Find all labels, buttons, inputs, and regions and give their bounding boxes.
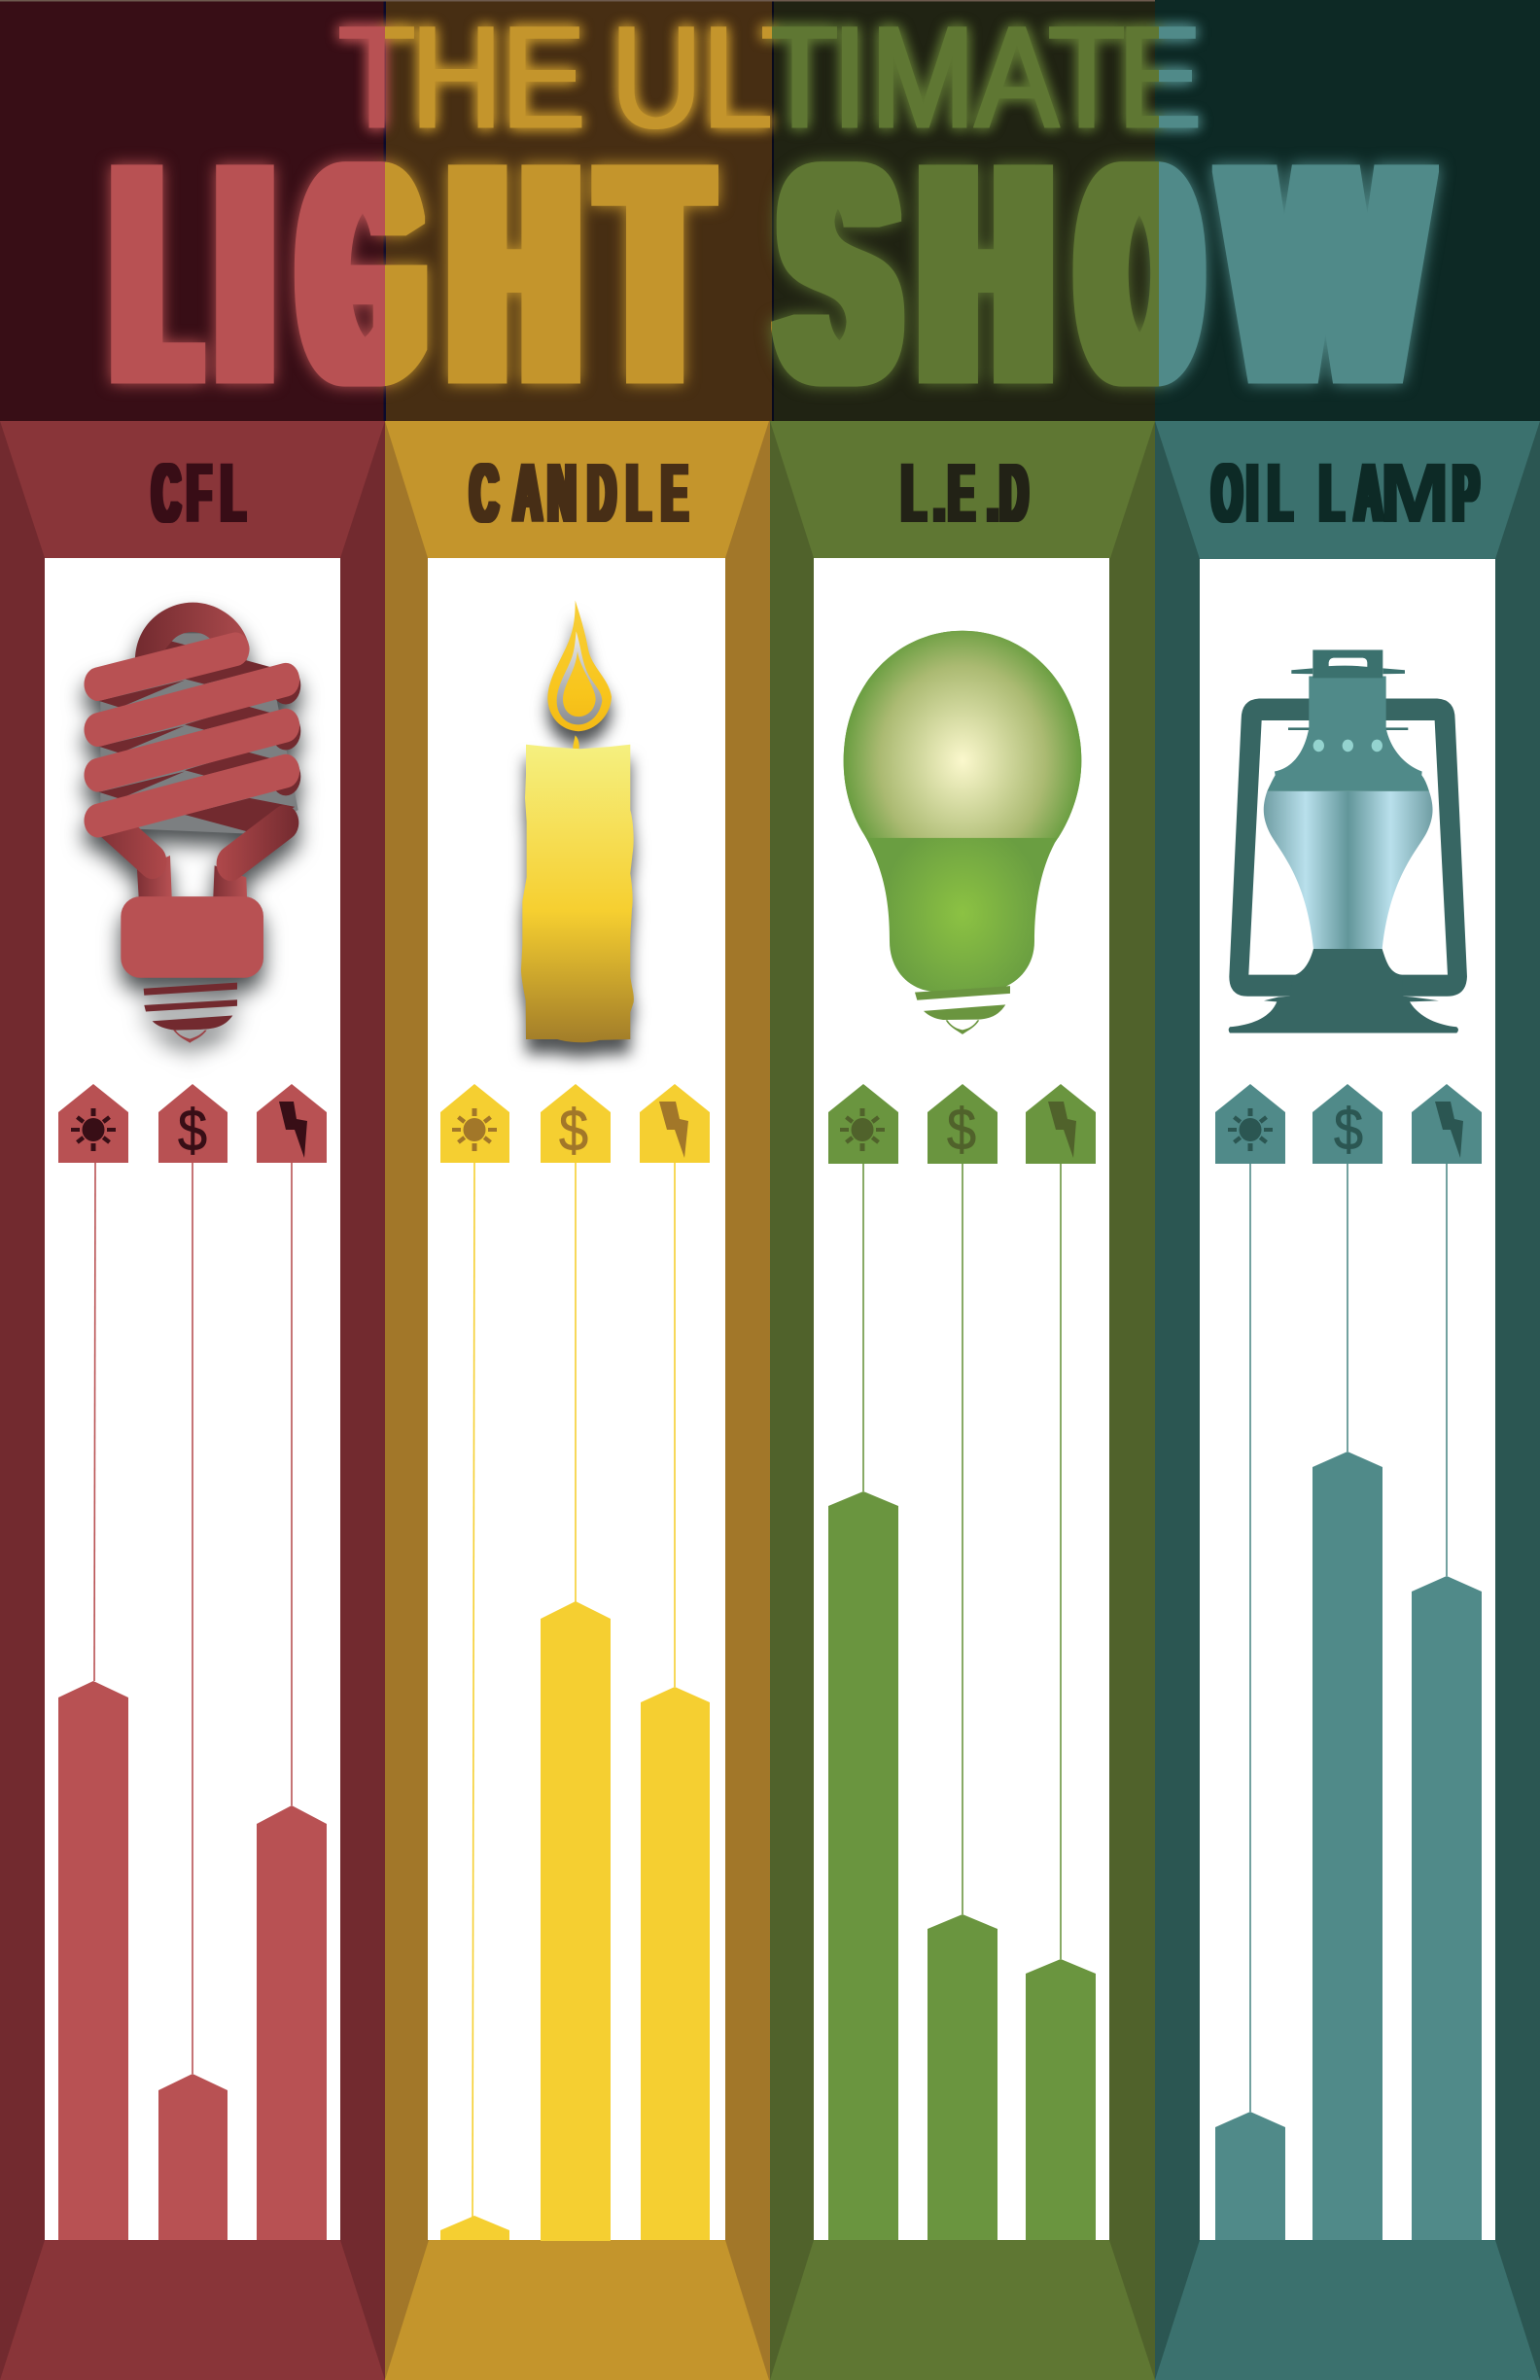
heading: Oil lamp: M (1380, 447, 1450, 539)
icon tag: cost (928, 1084, 998, 1164)
panel: CFL (0, 421, 385, 2380)
heading: Oil lamp: OIL LA (1212, 447, 1382, 539)
heading: Oil lamp: P (1453, 447, 1479, 539)
metric icons: CFL (58, 1084, 327, 1163)
heading: CFL: CFL (153, 447, 245, 539)
panel: Candle (385, 421, 770, 2380)
bar chart: Oil lamp (1215, 1164, 1482, 2240)
metric icons: Oil lamp (1215, 1084, 1482, 1164)
icon tag: energy (1412, 1084, 1482, 1164)
title: LIGHT SHOW: S (784, 102, 893, 446)
heading: Oil lamp (1212, 447, 1479, 539)
title: LIGHT SHOW: H (925, 102, 1047, 446)
icon tag: cost (541, 1084, 611, 1163)
metric icons: Candle (440, 1084, 710, 1163)
title: LIGHT SHOW: I (223, 102, 267, 446)
icon tag: cost: $ (1334, 1097, 1363, 1162)
icon: candle (521, 601, 634, 1042)
metric icons: LED (828, 1084, 1096, 1164)
title: LIGHT SHOW: O (1085, 102, 1195, 446)
bar chart: Candle (440, 1163, 710, 2241)
title: LIGHT SHOW (121, 102, 1423, 446)
panel frame: Candle (385, 421, 770, 2380)
title: LIGHT SHOW: T (607, 102, 703, 446)
icon tag: cost (158, 1084, 228, 1163)
title: LIGHT SHOW: L (121, 102, 192, 446)
panel: Oil lamp (1155, 421, 1540, 2380)
icon tag: brightness (1215, 1084, 1285, 1164)
panel frame: CFL (0, 421, 385, 2380)
title: LIGHT SHOW: W (1229, 102, 1423, 446)
bar chart: CFL (58, 1163, 327, 2240)
icon tag: cost: $ (559, 1098, 588, 1163)
icon tag: cost (1312, 1084, 1382, 1164)
icon tag: cost: $ (178, 1098, 207, 1163)
panel frame: LED (770, 421, 1155, 2380)
icon tag: energy (1026, 1084, 1096, 1164)
icon tag: energy (640, 1084, 710, 1163)
icon tag: cost: $ (947, 1097, 976, 1162)
icon tag: energy (257, 1084, 327, 1163)
heading: Candle: CANDLE (471, 447, 687, 539)
icon tag: brightness (440, 1084, 509, 1163)
panel: LED (770, 421, 1155, 2380)
title: LIGHT SHOW: G (306, 102, 419, 446)
title band: dark colour blocks (0, 0, 1540, 421)
bar chart: LED (828, 1164, 1096, 2240)
icon: CFL bulb (98, 603, 300, 1043)
heading: LED: L.E.D (902, 447, 1028, 539)
title: LIGHT SHOW: H (455, 102, 574, 446)
icon: oil lamp (1229, 649, 1467, 1033)
panel frame: Oil lamp (1155, 421, 1540, 2380)
icon tag: brightness (58, 1084, 128, 1163)
icon tag: brightness (828, 1084, 898, 1164)
icon: LED bulb (844, 631, 1081, 1034)
